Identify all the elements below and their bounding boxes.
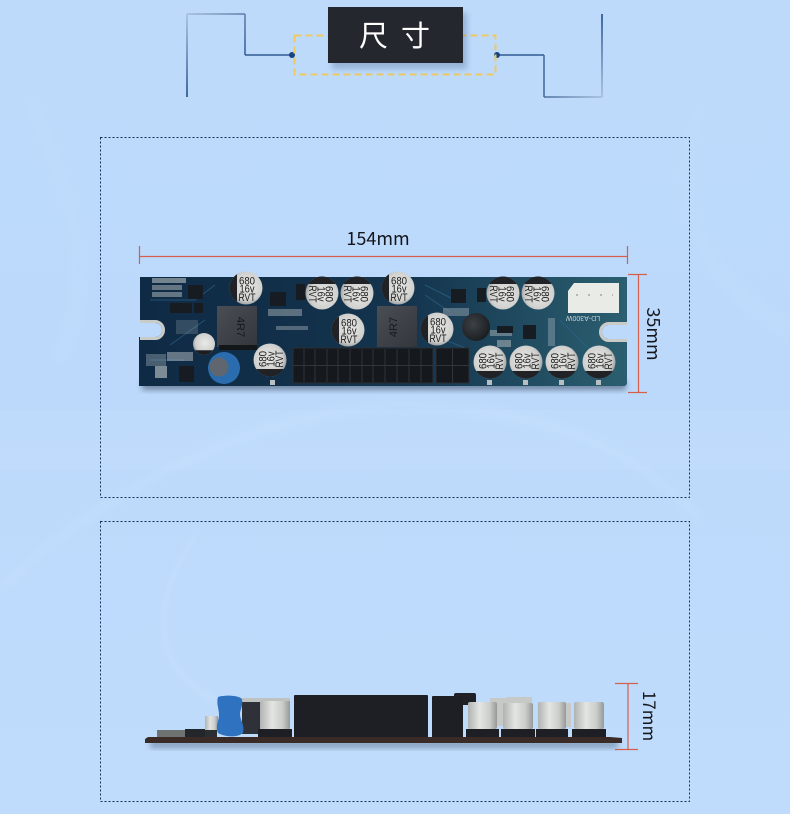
inductor left: 4R7 — [234, 317, 246, 337]
capacitor 4: 680 — [391, 276, 407, 288]
title plate — [328, 7, 467, 69]
capacitor 5: 680 — [341, 318, 357, 330]
right capacitors — [466, 702, 606, 737]
title decoration: right connector line — [494, 14, 602, 97]
capacitor 4: 16v — [392, 284, 407, 296]
capacitor 6: 16v — [430, 325, 446, 337]
capacitor 5: RVT — [340, 334, 358, 346]
capacitor 8: RVT — [487, 286, 499, 303]
capacitor 9 — [522, 276, 554, 310]
capacitor 11: 680 — [514, 353, 526, 369]
capacitors — [230, 272, 616, 378]
capacitor body 3 — [536, 702, 568, 737]
capacitor 12: 680 — [550, 353, 562, 369]
board body — [139, 277, 627, 386]
width dimension: 154mm — [140, 225, 628, 264]
capacitor 9: 680 — [538, 286, 550, 302]
capacitor 6: RVT — [430, 333, 447, 345]
capacitor 7: RVT — [274, 350, 286, 368]
dark capacitor band — [242, 698, 290, 734]
capacitor 4 — [382, 272, 414, 304]
title decoration: left connector line — [187, 14, 295, 97]
silver capacitor — [258, 701, 292, 738]
dimension: 17mm marker: 17mm — [638, 691, 663, 741]
capacitor 9: RVT — [522, 286, 534, 303]
capacitor 13: RVT — [603, 352, 615, 370]
capacitor 10: 16v — [486, 353, 498, 368]
capacitor 12: RVT — [566, 352, 578, 370]
capacitor 1 — [230, 272, 262, 304]
capacitor 8 — [486, 276, 520, 310]
capacitor body 4 — [572, 702, 606, 737]
capacitor body 1 — [466, 702, 499, 737]
board shadow — [142, 381, 626, 390]
capacitor 2: 16v — [314, 286, 326, 302]
capacitor 5 — [332, 314, 364, 346]
capacitor 13: 16v — [595, 353, 607, 368]
circuit board: side view — [145, 693, 622, 748]
back choke — [454, 693, 476, 705]
small silver capacitor — [205, 716, 218, 730]
mounting slots — [140, 322, 627, 340]
inductor left — [217, 306, 257, 350]
capacitor 8: 16v — [495, 286, 507, 302]
capacitor 7: 680 — [258, 351, 270, 367]
height dimension: 35mm: 35mm — [641, 307, 667, 361]
capacitor 11: 16v — [522, 353, 534, 368]
white fan connector — [565, 283, 619, 321]
capacitor body 2 — [501, 703, 535, 737]
capacitor 10 — [474, 346, 506, 378]
side pcb — [145, 737, 622, 743]
connector 8 pin — [436, 348, 469, 383]
title plate: 尺寸 — [359, 20, 443, 53]
capacitor 7: 16v — [266, 351, 278, 366]
capacitor 4: RVT — [390, 292, 408, 304]
white fan connector: LD-A300W — [565, 314, 600, 321]
blue capacitor — [208, 352, 240, 384]
side shadow — [150, 741, 618, 748]
capacitor 2 — [306, 276, 338, 310]
capacitor 11 — [510, 346, 542, 378]
choke coil — [462, 313, 490, 341]
panel: top view frame — [100, 138, 690, 498]
black 8 pin connector — [432, 696, 463, 738]
capacitor 9: 16v — [530, 286, 542, 302]
capacitor 1: 16v — [240, 284, 255, 296]
capacitor 3: RVT — [341, 286, 353, 303]
blue coil — [217, 696, 243, 736]
capacitor 3: 680 — [358, 286, 370, 302]
capacitor 10: RVT — [494, 352, 506, 370]
capacitor 2: RVT — [306, 286, 318, 303]
surface components — [157, 729, 217, 737]
dimension: 17mm marker — [615, 684, 663, 750]
capacitor 11: RVT — [530, 352, 542, 370]
capacitor 13: 680 — [586, 353, 598, 369]
capacitor 3: 16v — [349, 286, 361, 302]
title decoration: dashed yellow frame — [294, 36, 496, 74]
circuit board: top view — [139, 272, 627, 390]
capacitor 5: 16v — [342, 326, 357, 338]
capacitor 7 — [254, 344, 286, 376]
capacitor 8: 680 — [504, 286, 516, 302]
capacitor 12: 16v — [558, 353, 570, 368]
chips — [170, 284, 536, 382]
trace detail — [150, 285, 590, 360]
back capacitors — [490, 697, 571, 727]
capacitor 13 — [582, 346, 616, 378]
capacitor 6 — [420, 312, 454, 346]
capacitor 6: 680 — [430, 316, 446, 328]
capacitor 2: 680 — [322, 286, 334, 302]
capacitor 1: 680 — [239, 276, 255, 288]
capacitor 12 — [546, 346, 578, 378]
small components — [146, 278, 601, 385]
inductor right — [377, 306, 417, 347]
capacitor 1: RVT — [238, 292, 256, 304]
capacitor 10: 680 — [478, 353, 490, 369]
connector 24 pin — [293, 348, 433, 383]
height dimension: 35mm — [628, 274, 667, 392]
black 24 pin connector — [294, 695, 428, 738]
panel: side view frame — [100, 522, 690, 802]
small capacitor — [193, 333, 215, 355]
capacitor 3 — [340, 276, 374, 310]
inductor right: 4R7 — [388, 317, 400, 337]
width dimension: 154mm: 154mm — [346, 225, 410, 251]
